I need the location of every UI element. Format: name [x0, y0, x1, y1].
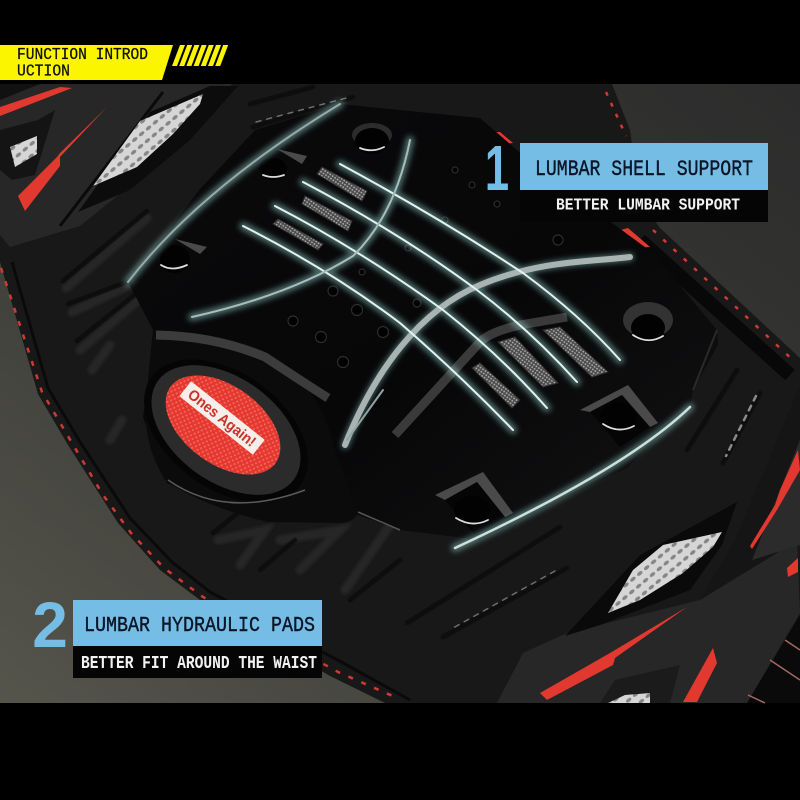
shell: lumbar hard shell: [128, 104, 718, 540]
snap buttons: [160, 123, 673, 535]
logo housing: [117, 330, 358, 532]
callout 2 subtitle box: [73, 646, 322, 678]
shell lower edge highlight: [358, 512, 400, 530]
callout 1: lumbar shell support: [485, 132, 768, 222]
red accent stripes: [0, 87, 800, 702]
lower right stitched mesh frame: [565, 502, 737, 636]
header tag background: [0, 45, 173, 80]
upper left trim panel: [0, 84, 232, 247]
mesh panel: small left: [10, 136, 37, 167]
mesh panel: lower right: [608, 532, 722, 613]
header hazard stripes: [172, 45, 228, 66]
callout 1 heading: LUMBAR SHELL SUPPORT: [535, 157, 753, 182]
lower right strap: [747, 615, 800, 703]
callout 2: lumbar hydraulic pads: [32, 589, 322, 678]
body stitching band: [12, 262, 410, 700]
body grooves: [63, 87, 760, 637]
mesh panel: upper left: [93, 94, 203, 186]
vents: upper mesh slots: [273, 167, 367, 250]
protector body: [0, 84, 800, 703]
lower right trim panel: [497, 540, 800, 703]
header text: FUNCTION INTROD: [17, 45, 148, 64]
callout 2 heading box: [73, 600, 322, 646]
number 2: 2: [32, 589, 68, 661]
callout 1 subtitle: BETTER LUMBAR SUPPORT: [556, 196, 740, 216]
header tag: function introduction: [0, 45, 228, 80]
shell rivet holes: [288, 167, 563, 368]
highlight lines: [128, 104, 690, 548]
upper left stitched mesh frame: [78, 86, 238, 212]
callout 2 heading: LUMBAR HYDRAULIC PADS: [84, 614, 315, 638]
photo: back protector product image: [0, 84, 800, 703]
mesh panel: small lower: [608, 693, 650, 703]
callout 2 subtitle: BETTER FIT AROUND THE WAIST: [81, 654, 317, 674]
vents: lower mesh slots: [472, 327, 608, 408]
callout 1 heading box: [520, 143, 768, 190]
number 1: 1: [485, 132, 509, 204]
header tag: function introduction: UCTION: [17, 62, 70, 80]
lower right inner pocket: [600, 665, 680, 703]
logo text: Ones Again!: [184, 386, 259, 451]
shell grey inset bands: [395, 317, 567, 435]
red stitches: [1, 92, 795, 697]
big swoosh highlight: [345, 257, 630, 445]
highlight lines: glow: [128, 104, 690, 548]
callout 1 subtitle box: [520, 190, 768, 222]
